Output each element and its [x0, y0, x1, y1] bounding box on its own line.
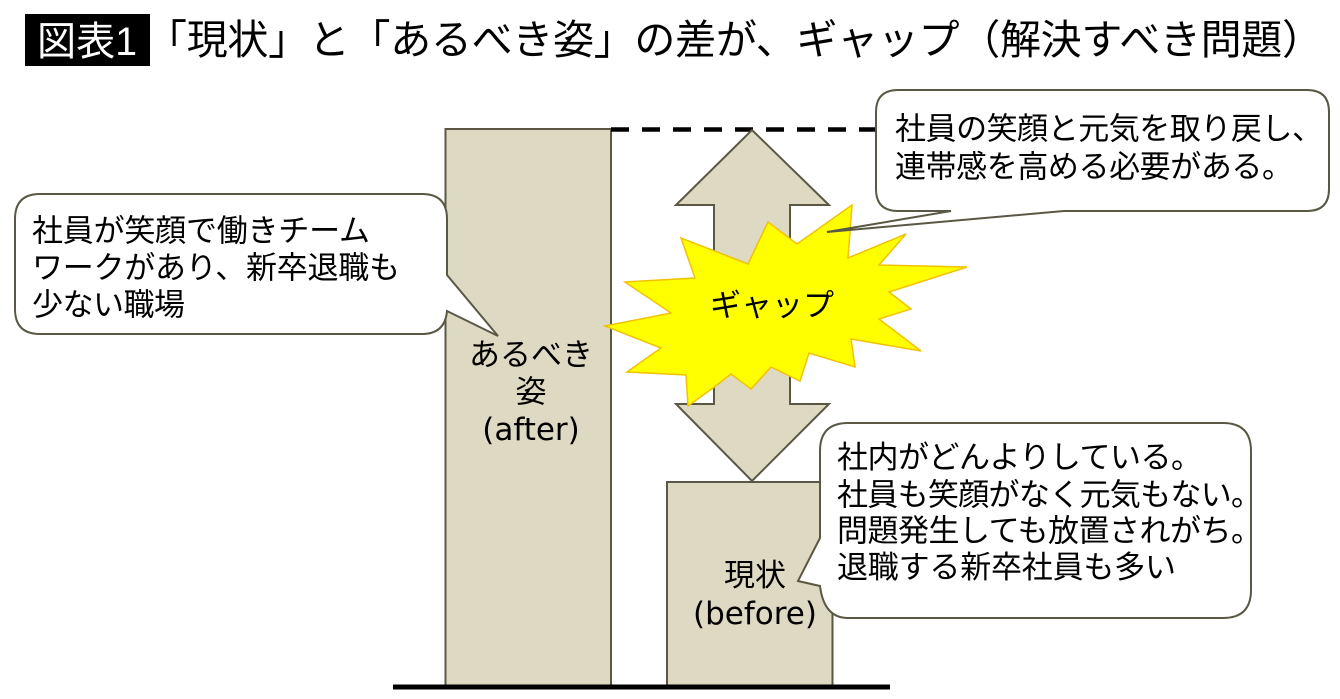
callout: ideal workplace: 少ない職場: [32, 288, 185, 322]
callout: what is needed: 連帯感を高める必要がある。: [895, 150, 1293, 184]
title badge: [25, 14, 150, 66]
callout: current situation: [798, 423, 1262, 618]
callout: what is needed: [827, 90, 1329, 232]
bar: current state (before): [667, 482, 832, 686]
bar: ideal state (after): あるべき: [469, 338, 593, 374]
callout: current situation: 社員も笑顔がなく元気もない。: [837, 478, 1262, 512]
dashed target line: [611, 127, 878, 132]
bar: current state (before): (before): [693, 596, 817, 632]
bar: ideal state (after): (after): [482, 412, 580, 448]
title badge: 図表1: [37, 20, 137, 64]
callout: ideal workplace: 社員が笑顔で働きチーム: [32, 214, 370, 248]
gap starburst: ギャップ: [710, 288, 834, 324]
callout: ideal workplace: [15, 194, 498, 336]
title text: 「現状」と「あるべき姿」の差が、ギャップ（解決すべき問題）: [146, 17, 1323, 63]
callout: ideal workplace: ワークがあり、新卒退職も: [32, 250, 400, 286]
callout: what is needed: 社員の笑顔と元気を取り戻し、: [895, 112, 1323, 146]
callout: current situation: 退職する新卒社員も多い: [837, 550, 1176, 585]
title: [25, 14, 1323, 66]
bar: ideal state (after): [446, 129, 611, 686]
callout: current situation: 問題発生しても放置されがち。: [837, 514, 1262, 548]
bar: ideal state (after): 姿: [516, 374, 546, 410]
double-headed gap arrow: [676, 130, 829, 481]
bar: current state (before): 現状: [724, 558, 786, 594]
baseline: [393, 684, 890, 690]
callout: current situation: 社内がどんよりしている。: [837, 440, 1202, 475]
gap starburst: [605, 205, 967, 406]
